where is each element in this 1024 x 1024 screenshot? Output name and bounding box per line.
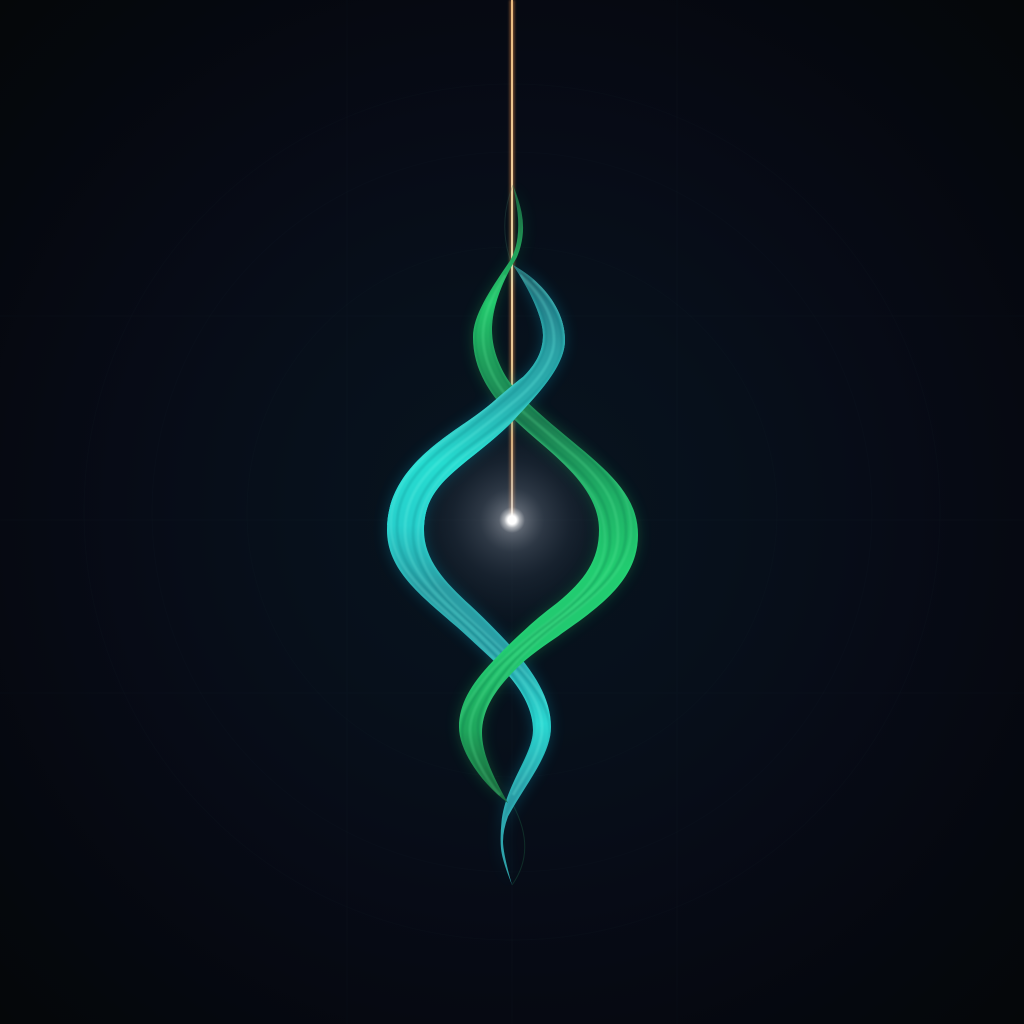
- vertical golden light beam: [510, 0, 514, 520]
- green ribbon: full strand: [457, 185, 638, 803]
- ribbon glows: [387, 185, 638, 885]
- glowing point of light: [397, 405, 627, 635]
- cyan ribbon: upper crossing passing over green: [387, 265, 565, 525]
- cyan ribbon: full strand: [387, 265, 567, 885]
- faint hairline strands at the tips: [505, 185, 525, 885]
